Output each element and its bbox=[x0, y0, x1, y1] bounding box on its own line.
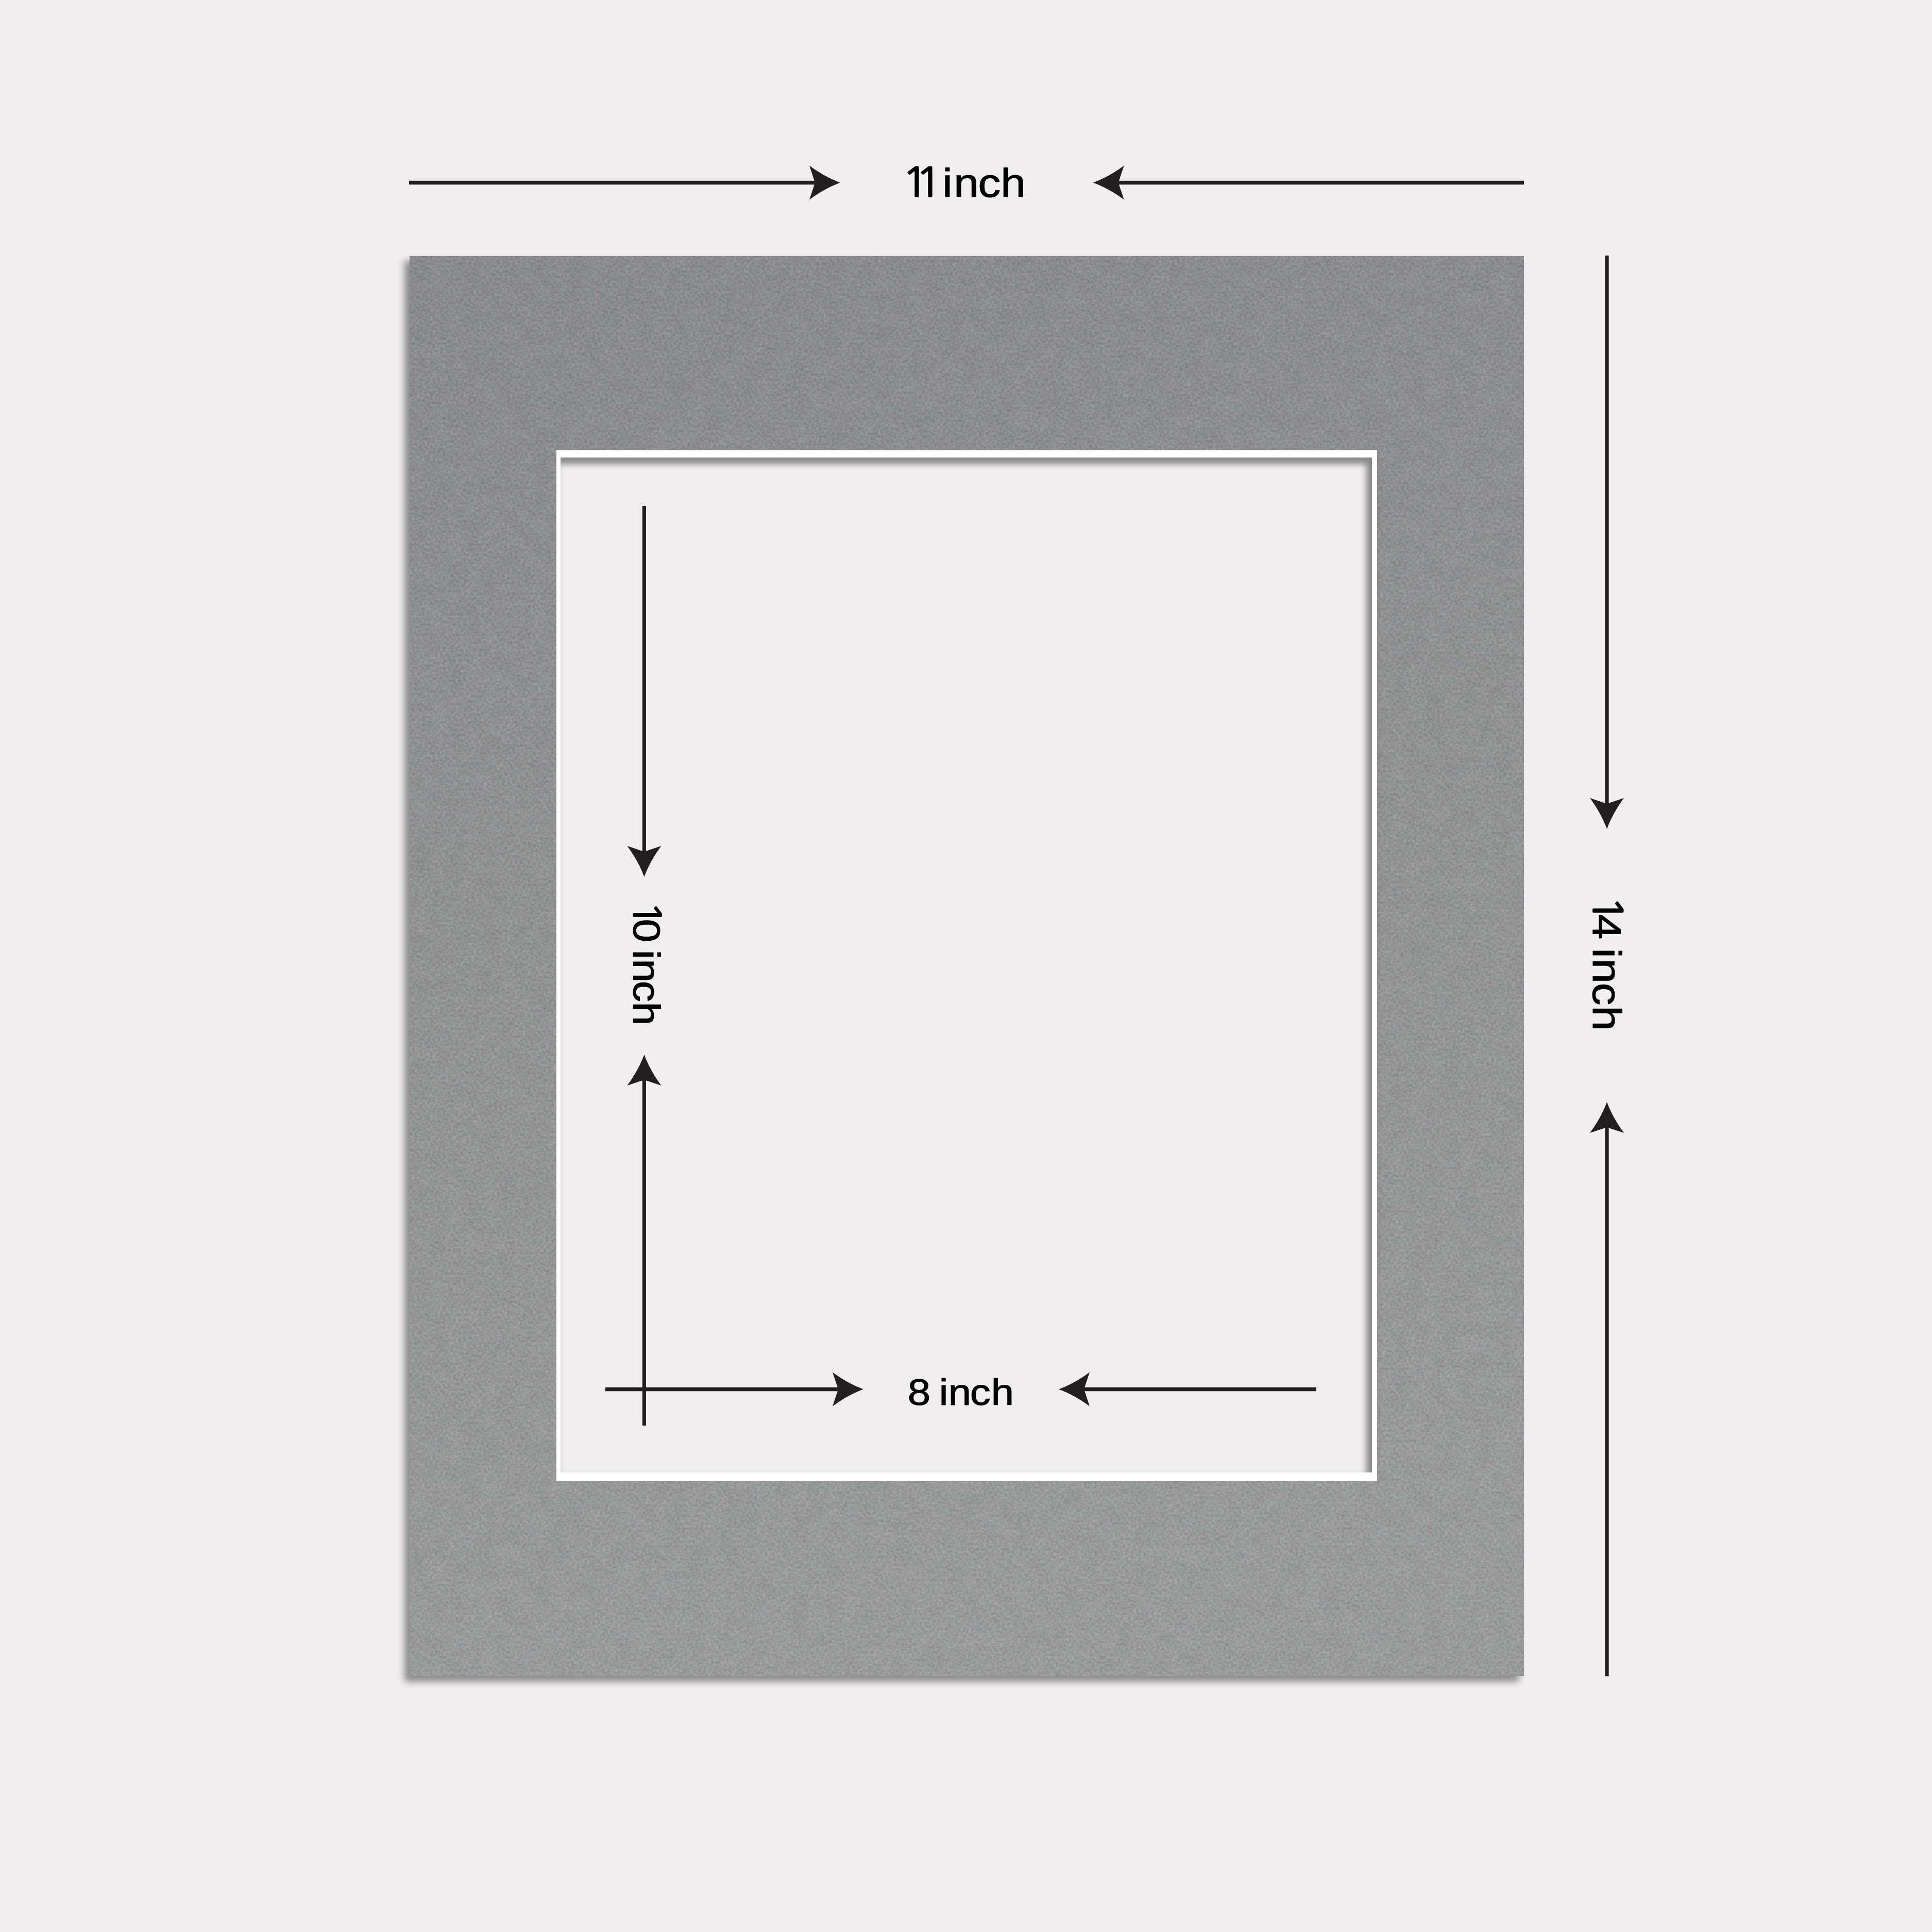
arrow: 10 inch opening height, top bbox=[627, 506, 661, 877]
mat broad mottling bbox=[410, 256, 1524, 1676]
panel: grey mat board bbox=[404, 256, 1524, 1682]
mat surface bbox=[410, 256, 1524, 1676]
mat drop shadow bbox=[404, 261, 1519, 1682]
window opening bbox=[561, 460, 1370, 1472]
white bevel of the window bbox=[556, 450, 1377, 1481]
arrow: 14 inch height, top bbox=[1590, 256, 1624, 829]
label: 10 inch: 10 inch bbox=[625, 901, 667, 1025]
arrow: 14 inch height, bottom bbox=[1590, 1102, 1624, 1676]
infographic canvas bbox=[400, 166, 1624, 1687]
arrow: 8 inch opening width, left bbox=[605, 1372, 863, 1406]
label: 8 inch: 8 inch bbox=[908, 1372, 1014, 1413]
arrow: 11 inch width, left bbox=[409, 166, 840, 200]
label: 11 inch: 11 inch bbox=[902, 160, 1026, 206]
arrow: 8 inch opening width, right bbox=[1059, 1372, 1316, 1406]
label: 14 inch: 14 inch bbox=[1584, 895, 1630, 1031]
arrow: 11 inch width, right bbox=[1093, 166, 1524, 200]
mat paper texture bbox=[410, 256, 1524, 1676]
arrow: 10 inch opening height, bottom bbox=[627, 1055, 661, 1426]
